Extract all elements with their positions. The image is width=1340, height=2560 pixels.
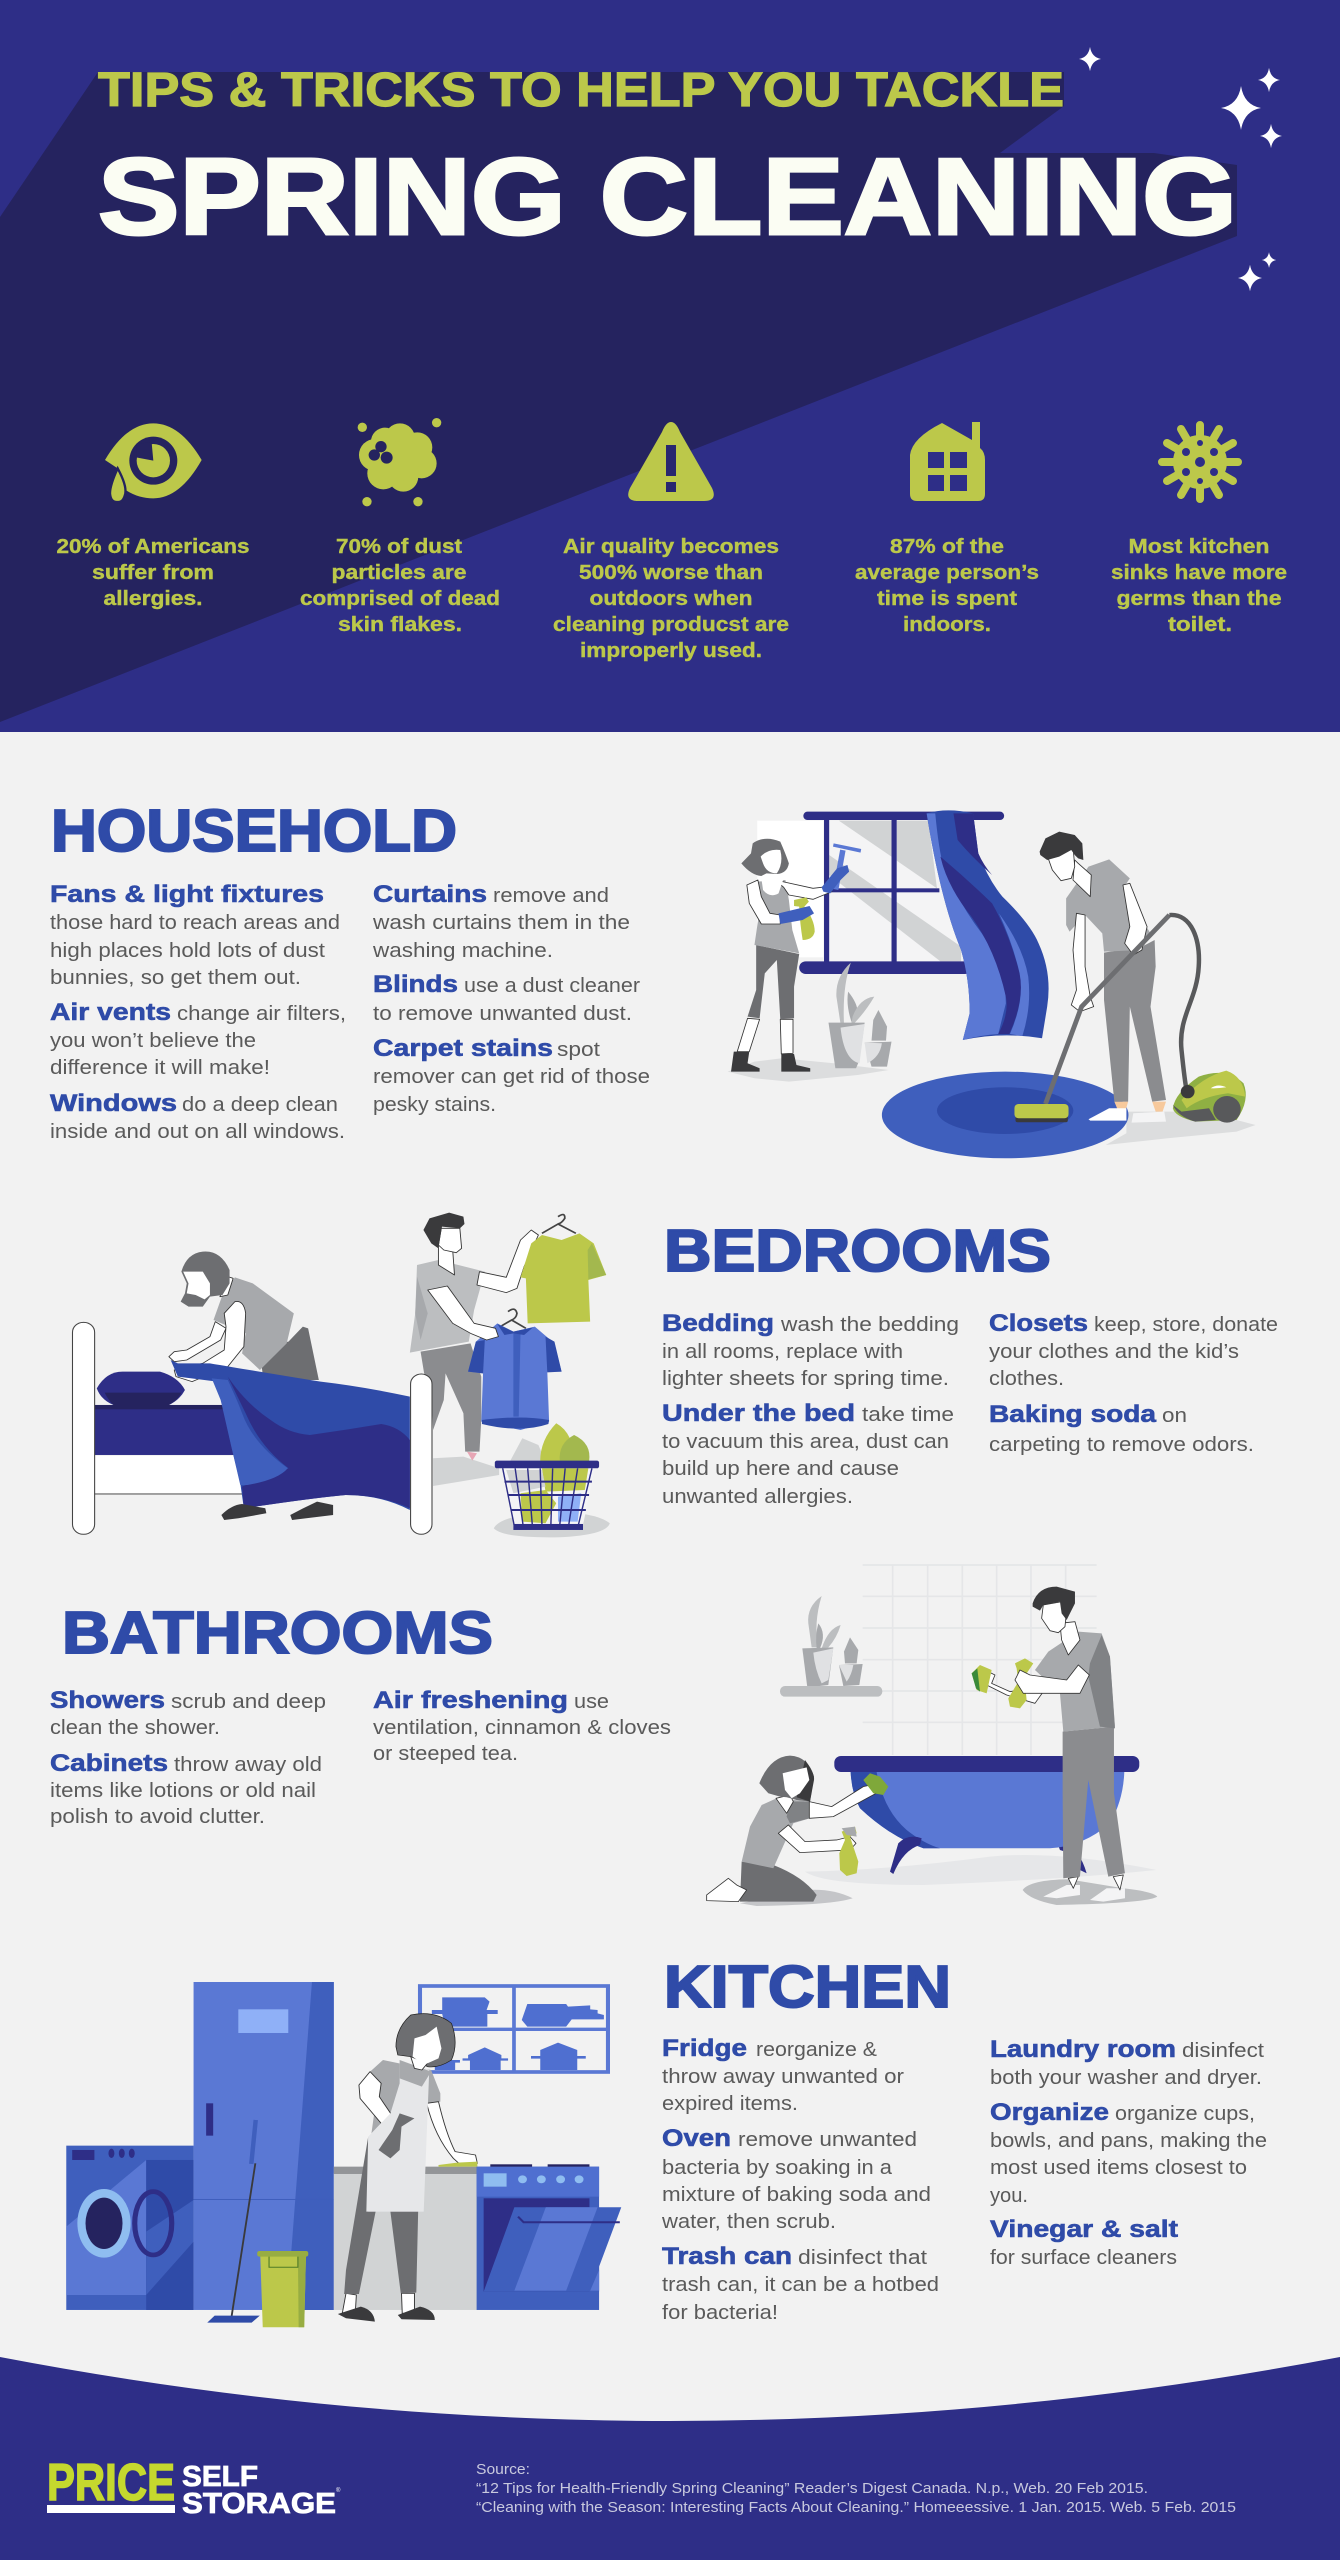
text: bathrooms column one: Cabinets [50,1750,168,1777]
text: bathrooms column two: ventilation, cinnamon & cloves [373,1717,671,1739]
text: bathrooms column one: throw away old [174,1754,322,1776]
text: kitchen column one: throw away unwanted or [662,2066,904,2088]
curtain [927,810,1049,1040]
stat: kitchen sinks: toilet. [1168,614,1232,636]
text: household column one: change air filters, [177,1003,346,1025]
man hanging clothes [410,1213,538,1486]
text: bedrooms column two [989,1310,1278,1456]
text: bathrooms column one: Showers [50,1687,165,1714]
man cleaning [972,1587,1157,1905]
text: kitchen column one: Trash can [662,2243,792,2270]
text: household column one: you won’t believe the [50,1030,256,1052]
text: bedrooms column one: to vacuum this area, dust can [662,1431,949,1453]
text: bedrooms column two: Closets [989,1310,1088,1337]
stat: allergies: 20% of Americans [56,536,250,558]
stat: air quality: improperly used. [580,640,762,662]
blue shirt on hanger [428,1286,562,1430]
text: bathrooms column one: scrub and deep [171,1691,326,1713]
source notes: “12 Tips for Health-Friendly Spring Cleaning” Reader’s Digest Canada. N.p., Web. 20 Feb 2015. [476,2480,1148,2497]
text: kitchen column one: Fridge [662,2035,747,2062]
text: household column one [50,881,346,1143]
icon: sparkles [1079,47,1282,291]
text: bathrooms column one: items like lotions or old nail [50,1780,316,1802]
potted plants [828,963,892,1068]
text: household column one: do a deep clean [182,1094,338,1116]
panel: bedrooms [72,1213,1278,1537]
text: household column two: remove and [493,885,609,907]
stat: indoors [855,536,1039,636]
text: household column two: to remove unwanted dust. [373,1003,632,1025]
stat: kitchen sinks [1111,536,1287,636]
stat: indoors: 87% of the [890,536,1004,558]
text: bedrooms column two: on [1162,1405,1187,1427]
logo: price self storage: ® [336,2487,341,2494]
text: bathrooms column two: use [574,1691,609,1713]
trash can [257,2251,308,2327]
illustration: cleaning window and vacuuming [728,810,1256,1158]
floor shadow [805,1855,1157,1885]
text: kitchen column one: water, then scrub. [661,2211,836,2233]
logo: price self storage: STORAGE [182,2488,336,2520]
illustration: kitchen scene [66,1982,621,2327]
text: household column two: Blinds [373,971,458,998]
panel: kitchen [66,1954,1267,2327]
stat: indoors: average person’s [855,562,1039,584]
window [757,812,1004,974]
oven [477,2164,621,2310]
text: bathrooms column two [373,1687,671,1765]
text: household column two: wash curtains them in the [372,912,630,934]
text: household column one: difference it will make! [50,1057,270,1079]
text: bedrooms column one: wash the bedding [780,1314,959,1336]
footer panel [0,2357,1340,2560]
text: kitchen column two: Organize [990,2099,1109,2126]
stat: dust: comprised of dead [300,588,500,610]
text: kitchen column two [990,2036,1267,2269]
stat: air quality: cleaning producst are [553,614,789,636]
stat: dust: 70% of dust [336,536,462,558]
washer and dryer [66,2146,194,2310]
woman with squeegee [728,839,889,1082]
text: bedrooms column one: lighter sheets for spring time. [662,1368,949,1390]
mop [207,2120,260,2323]
heading: bathrooms: BATHROOMS [62,1600,493,1666]
text: bedrooms column two: keep, store, donate [1094,1314,1278,1336]
source notes: “Cleaning with the Season: Interesting Facts About Cleaning.” Homeeessive. 1 Jan. 2015. Web. 5 Feb. 2015 [476,2499,1236,2516]
text: kitchen column two: most used items closest to [990,2157,1247,2179]
text: bedrooms column one: unwanted allergies. [662,1486,853,1508]
refrigerator [194,1982,334,2310]
vacuum cleaner [1173,1071,1246,1123]
text: bedrooms column two: Baking soda [989,1401,1157,1428]
text: kitchen column one: for bacteria! [662,2302,778,2324]
text: bedrooms column one: in all rooms, replace with [662,1341,903,1363]
man vacuuming [1040,832,1199,1123]
text: household column two: use a dust cleaner [464,975,640,997]
stat: air quality: Air quality becomes [563,536,779,558]
text: kitchen column one: trash can, it can be a hotbed [662,2274,939,2296]
stat: kitchen sinks: Most kitchen [1128,536,1270,558]
icon: germ [1162,425,1238,499]
text: bedrooms column two: your clothes and the kid’s [989,1341,1239,1363]
tiled wall [863,1565,1097,1755]
text: kitchen column two: bowls, and pans, making the [990,2130,1267,2152]
rug [882,1072,1256,1158]
shelves with pots [420,1986,608,2072]
text: kitchen column two: Vinegar & salt [990,2216,1178,2243]
text: household column two: washing machine. [372,940,553,962]
stat: indoors: indoors. [903,614,991,636]
text: household column one: Fans & light fixtures [50,881,324,908]
logo: price self storage [47,2454,341,2520]
text: kitchen column one [661,2035,939,2324]
stat: indoors: time is spent [877,588,1017,610]
icon: warning triangle [628,422,714,501]
green shirt on hanger [521,1215,606,1323]
text: household column two: remover can get rid of those [373,1066,650,1088]
title: tips and tricks: TIPS & TRICKS TO HELP YOU TACKLE [98,64,1064,117]
woman making the bed [169,1252,319,1382]
text: kitchen column one: remove unwanted [738,2129,917,2151]
stat: dust [300,536,500,636]
text: kitchen column one: Oven [662,2125,731,2152]
text: household column one: bunnies, so get them out. [50,967,301,989]
text: household column two: pesky stains. [373,1094,496,1116]
text: household column two: Carpet stains [373,1035,553,1062]
source notes [476,2461,1236,2516]
stat: allergies: allergies. [104,588,202,610]
text: bathrooms column two: Air freshening [373,1687,568,1714]
blanket [171,1360,410,1510]
stat: dust: skin flakes. [338,614,462,636]
header panel [0,0,1340,732]
illustration: making the bed and hanging clothes [72,1213,610,1537]
stat: air quality: 500% worse than [579,562,763,584]
text: kitchen column one: bacteria by soaking in a [662,2157,893,2179]
text: bedrooms column two: carpeting to remove odors. [989,1434,1254,1456]
text: household column two [372,881,650,1116]
bathtub [834,1756,1139,1874]
text: bathrooms column one: clean the shower. [50,1717,220,1739]
heading: household: HOUSEHOLD [51,798,457,864]
text: household column one: high places hold lots of dust [50,940,325,962]
text: household column one: Air vents [50,999,171,1026]
title: spring cleaning: SPRING CLEANING [98,136,1237,258]
text: bedrooms column one: Under the bed [662,1400,855,1427]
heading: bedrooms: BEDROOMS [664,1218,1051,1284]
logo: price self storage: SELF [182,2461,258,2493]
logo: price self storage: PRICE [47,2454,175,2512]
text: bedrooms column one: take time [862,1404,954,1426]
text: kitchen column one: expired items. [662,2093,798,2115]
text: kitchen column one: disinfect that [798,2247,927,2269]
text: bedrooms column two: clothes. [989,1368,1064,1390]
text: household column one: those hard to reach areas and [50,912,340,934]
laundry basket [494,1423,610,1537]
text: kitchen column two: Laundry room [990,2036,1176,2063]
woman kneeling [707,1756,888,1906]
text: household column one: inside and out on all windows. [50,1121,345,1143]
panel: bathrooms [50,1565,1157,1906]
text: kitchen column two: for surface cleaners [990,2247,1177,2269]
bed [72,1322,274,1534]
icon: watery eye [105,423,202,502]
text: bedrooms column one: build up here and cause [662,1458,899,1480]
text: kitchen column one: reorganize & [756,2039,878,2061]
text: bathrooms column one [50,1687,326,1828]
icon: house [910,422,985,501]
stat: allergies: suffer from [92,562,214,584]
stat: kitchen sinks: germs than the [1116,588,1282,610]
wall shelf with plants [780,1596,882,1697]
text: kitchen column two: you. [990,2185,1028,2207]
text: bathrooms column one: polish to avoid clutter. [50,1806,265,1828]
text: bedrooms column one [662,1310,959,1508]
heading: kitchen: KITCHEN [664,1954,951,2020]
right bed post [411,1374,432,1534]
text: kitchen column two: organize cups, [1115,2103,1255,2125]
stat: dust: particles are [332,562,466,584]
stat: allergies [56,536,250,610]
illustration: scrubbing the tub [707,1565,1157,1906]
text: kitchen column one: mixture of baking soda and [662,2184,931,2206]
slippers [221,1502,333,1520]
text: household column one: Windows [50,1090,177,1117]
stat: air quality: outdoors when [590,588,752,610]
panel: household [50,798,1256,1158]
counter [334,2167,477,2310]
icon: dust cloud [358,418,441,506]
text: kitchen column two: disinfect [1182,2040,1264,2062]
text: kitchen column two: both your washer and dryer. [990,2067,1262,2089]
stat: kitchen sinks: sinks have more [1111,562,1287,584]
text: household column two: spot [557,1039,600,1061]
text: household column two: Curtains [373,881,487,908]
stat: air quality [553,536,789,662]
text: bathrooms column two: or steeped tea. [373,1743,518,1765]
mop head [1014,1104,1069,1122]
source notes: Source: [476,2461,530,2478]
woman wiping counter [338,2014,477,2322]
text: bedrooms column one: Bedding [662,1310,774,1337]
